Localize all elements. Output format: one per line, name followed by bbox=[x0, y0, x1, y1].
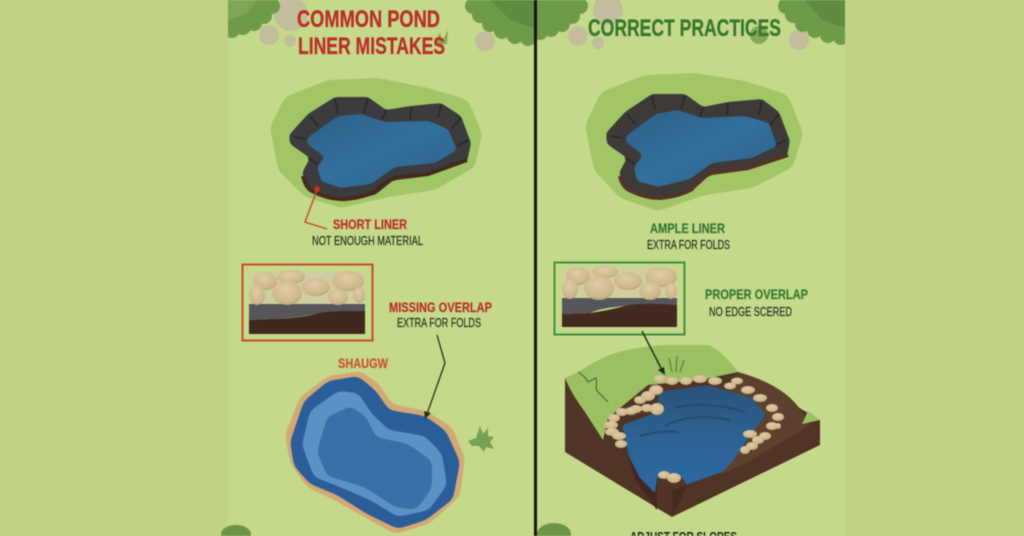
label: proper overlap: NO EDGE SCERED bbox=[709, 305, 792, 319]
title bbox=[297, 6, 445, 60]
trees and stones: top left panel bbox=[224, 0, 536, 51]
tree: bottom right bbox=[537, 523, 571, 536]
title: COMMON POND bbox=[297, 6, 440, 33]
callout: short liner bbox=[305, 186, 423, 248]
arrow: to overlap edge bbox=[424, 335, 445, 419]
arrow: to rock edge bbox=[642, 331, 665, 375]
callout: missing overlap: EXTRA FOR FOLDS bbox=[397, 316, 481, 330]
title: CORRECT PRACTICES bbox=[588, 15, 781, 42]
trees and stones: top right panel bbox=[532, 0, 849, 50]
label: ample liner: EXTRA FOR FOLDS bbox=[647, 238, 730, 252]
pond: short liner bbox=[270, 78, 482, 208]
label: shallow: SHAUGW bbox=[338, 356, 388, 371]
label: ample liner: AMPLE LINER bbox=[650, 220, 725, 236]
tree: bottom left bbox=[221, 525, 251, 536]
label: proper overlap: PROPER OVERLAP bbox=[705, 286, 808, 302]
panel: correct practices bbox=[532, 0, 849, 536]
panel: common mistakes bbox=[221, 0, 536, 536]
title: LINER MISTAKES bbox=[298, 33, 445, 60]
callout: short liner: NOT ENOUGH MATERIAL bbox=[312, 234, 423, 248]
icon: leaf plant bbox=[468, 426, 494, 452]
callout: missing overlap bbox=[389, 299, 492, 330]
inset: missing overlap edge bbox=[242, 264, 372, 340]
pond: shallow top view bbox=[285, 371, 465, 534]
label: proper overlap bbox=[705, 286, 808, 319]
rocks bbox=[604, 375, 784, 483]
divider bbox=[534, 0, 537, 536]
inset: proper overlap edge bbox=[554, 262, 684, 334]
callout: short liner: SHORT LINER bbox=[333, 216, 407, 232]
diagram: pond on slope cutaway bbox=[565, 345, 820, 517]
callout: missing overlap: MISSING OVERLAP bbox=[389, 299, 492, 315]
pond water bbox=[622, 385, 766, 493]
pond: ample liner bbox=[585, 73, 803, 211]
label: ample liner bbox=[647, 220, 730, 252]
